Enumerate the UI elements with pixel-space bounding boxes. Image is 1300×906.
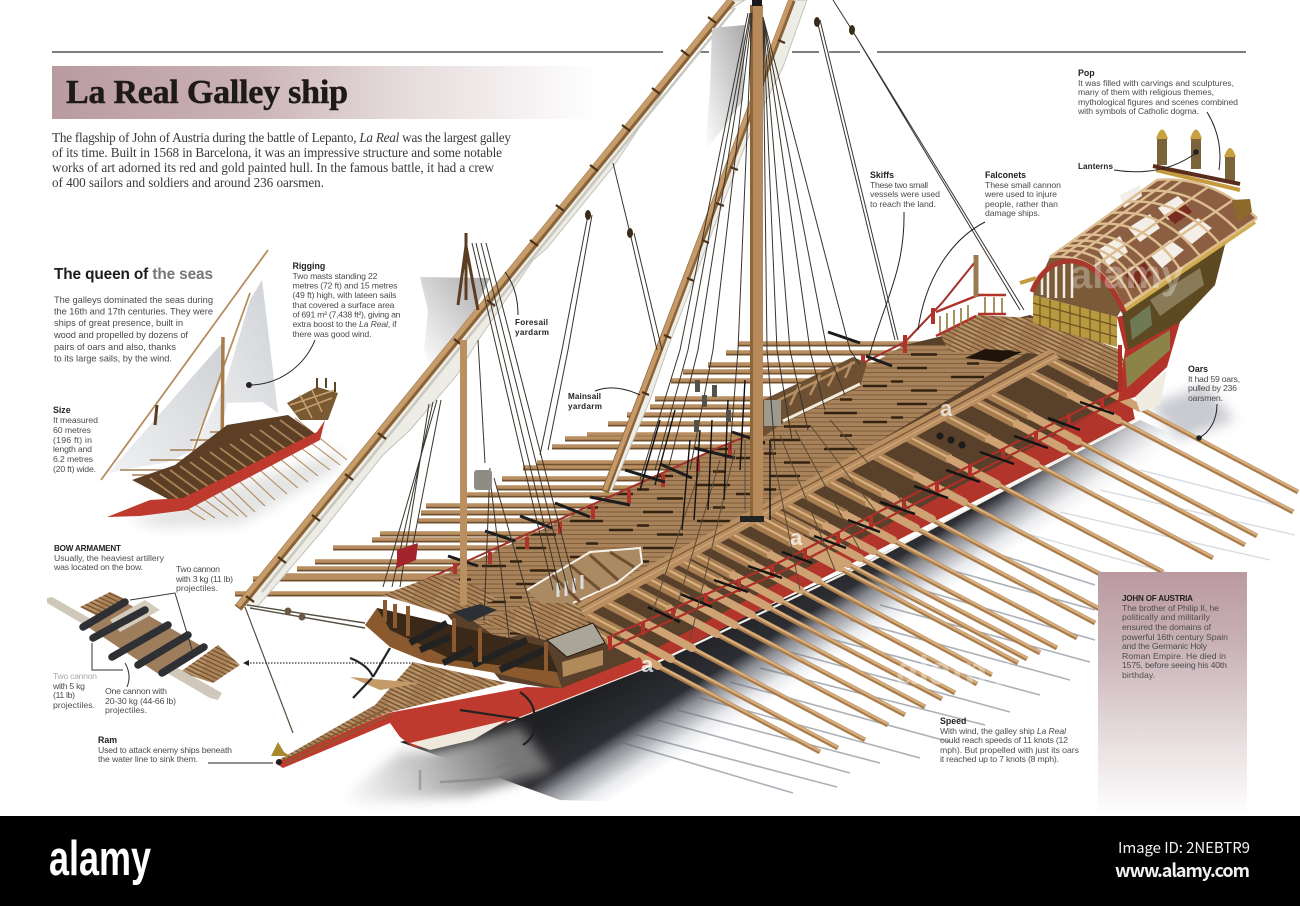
label: Size: 6.2 metres	[53, 454, 94, 464]
label: Rigging: there was good wind.	[292, 329, 372, 339]
leader: mainsail	[595, 388, 640, 395]
dotted arrow to bow	[243, 660, 413, 666]
bow red hull	[275, 657, 645, 768]
label: Falconets	[984, 170, 1061, 218]
label: Pop: with symbols of Catholic dogma.	[1077, 106, 1199, 116]
gold lattice	[1033, 295, 1117, 347]
label: Speed	[940, 716, 1080, 764]
near rail with posts and swivel guns	[607, 385, 1132, 650]
panel: John of Austria	[1098, 572, 1247, 816]
dark beam	[453, 604, 497, 622]
intro text: of 400 sailors and soldiers and around 236 oarsmen.	[52, 175, 324, 190]
label: The queen of the seas: The galleys dominated the seas during	[54, 295, 213, 305]
forward canopy two	[480, 603, 590, 640]
label: Speed: mph). But propelled with just its oars	[940, 745, 1080, 755]
footer bar	[0, 816, 1300, 906]
label: two cannon 3 kg: Two cannon	[176, 564, 220, 574]
label: Speed: With wind, the galley ship La Real	[940, 726, 1067, 736]
label: Speed: Speed	[940, 716, 966, 726]
label: Pop	[1077, 68, 1238, 116]
label: Lanterns: Lanterns	[1078, 162, 1113, 171]
small balustrade	[562, 650, 603, 677]
lower balustrade	[1125, 330, 1170, 388]
label: Size	[53, 405, 98, 474]
label: Bow armament: Usually, the heaviest artillery	[54, 553, 165, 563]
label: Oars	[1188, 364, 1240, 403]
intro text: works of art adorned its red and gold painted hull. In the famous battle, it had a crew	[52, 160, 494, 175]
alamy logo: alamy	[49, 832, 151, 886]
label: Bow armament	[53, 544, 165, 572]
label: The queen of the seas: wood and propelled by dozens of	[53, 330, 188, 340]
panel: John of Austria: ensured the domains of	[1122, 622, 1212, 632]
label: one cannon: 20-30 kg (44-66 lb)	[105, 696, 176, 706]
title band	[52, 66, 600, 119]
armament hull	[47, 597, 222, 700]
label: two cannon 3 kg	[175, 564, 233, 593]
label: Pop: mythological figures and scenes combined	[1078, 97, 1238, 107]
stern white keel	[1135, 370, 1167, 412]
stern hull	[1117, 300, 1190, 402]
label: Pop: Pop	[1078, 68, 1095, 78]
label: two cannon 5 kg	[52, 671, 97, 710]
bow white keel	[410, 720, 507, 750]
intro text: The flagship of John of Austria during the battle of Lepanto, La Real was the largest galley	[52, 130, 511, 145]
leader: foresail	[505, 272, 518, 315]
bowsprit stays	[245, 605, 365, 733]
overview far oars	[120, 432, 270, 475]
top rule	[52, 51, 1246, 53]
forward deck and bow	[271, 575, 645, 768]
label: The queen of the seas: the 16th and 17th centuries. They were	[54, 306, 213, 316]
far side oars	[235, 343, 1040, 594]
panel: John of Austria: birthday.	[1122, 670, 1155, 680]
stern deck	[940, 315, 1135, 390]
cannons	[410, 623, 545, 670]
armament leader lines	[92, 593, 193, 687]
title: La Real Galley ship	[66, 74, 348, 111]
label: Mainsail yardarm: Mainsail	[568, 392, 601, 401]
label: Foresail yardarm	[515, 318, 549, 337]
label: Falconets: damage ships.	[985, 208, 1040, 218]
label: Bow armament: was located on the bow.	[53, 562, 143, 572]
overview stern	[287, 387, 338, 420]
image id: Image ID: 2NEBTR9	[1118, 837, 1250, 858]
rigging dark lower shrouds and blocks	[397, 17, 855, 568]
stern decorated frieze	[1122, 218, 1257, 350]
panel: John of Austria: 1575, before seeing his 40th	[1122, 660, 1227, 670]
roof white windows	[1098, 185, 1212, 268]
site url: www.alamy.com	[1115, 857, 1250, 883]
label: one cannon: projectiles.	[105, 705, 147, 715]
label: Ram: the water line to sink them.	[98, 754, 198, 764]
label: Skiffs: to reach the land.	[870, 199, 936, 209]
panel: John of Austria: JOHN OF AUSTRIA	[1122, 594, 1193, 603]
leader: rigging to small ship sail	[246, 340, 315, 388]
label: Rigging: metres (72 ft) and 15 metres	[292, 280, 398, 290]
label: Falconets: were used to injure	[984, 189, 1057, 199]
label: one cannon: One cannon with	[105, 686, 167, 696]
watermarks: alamy	[896, 649, 1010, 693]
rigging	[383, 0, 1024, 645]
forward base	[365, 608, 562, 688]
ship shadow on the sea	[330, 385, 1300, 806]
near oars	[563, 357, 1298, 752]
panel: John of Austria: powerful 16th century Spain	[1122, 632, 1228, 642]
glass hatch	[547, 623, 605, 657]
label: Mainsail yardarm	[568, 392, 602, 411]
armament plank sections	[80, 592, 127, 620]
label: Skiffs: These two small	[870, 180, 928, 190]
overview deck	[132, 415, 320, 507]
label: two cannon 3 kg: projectiles.	[176, 583, 218, 593]
forward canopy one	[382, 575, 497, 615]
watermarks: a	[641, 652, 654, 677]
stern castle	[1020, 170, 1257, 412]
leader: skiffs	[868, 212, 904, 360]
overview yards and mast	[101, 250, 268, 480]
intro text: of its time. Built in 1568 in Barcelona, it was an impressive structure and some notable	[52, 145, 502, 160]
rope falls over the deck	[650, 420, 910, 640]
armament cannons	[83, 602, 204, 673]
label: Size: 60 metres	[53, 425, 92, 435]
label: Speed: it reached up to 7 knots (8 mph).	[940, 754, 1059, 764]
bow deck	[275, 662, 507, 762]
watermarks: alamy	[1070, 253, 1184, 297]
label: Foresail yardarm: Foresail	[515, 318, 548, 327]
overview oars	[155, 418, 347, 520]
label: Rigging	[292, 261, 401, 339]
leader: ram	[208, 762, 273, 764]
label: Skiffs: Skiffs	[870, 170, 894, 180]
label: Size: (196 ft) in	[53, 435, 92, 445]
label: The queen of the seas: pairs of oars and also, thanks	[54, 342, 176, 352]
lower skiff	[527, 548, 642, 603]
label: Size: (20 ft) wide.	[53, 464, 96, 474]
watermarks: a	[940, 396, 953, 421]
label: Size: length and	[53, 444, 92, 454]
central gangway	[570, 349, 1060, 619]
label: one cannon	[105, 686, 176, 715]
leader: oars	[1196, 404, 1217, 441]
anchors	[350, 648, 534, 745]
overview main sail	[193, 280, 278, 453]
overview hull	[107, 420, 325, 517]
overview fore sail	[108, 343, 222, 473]
label: Ram: Used to attack enemy ships beneath	[98, 745, 232, 755]
leader: falconets	[918, 222, 985, 330]
canopy posts	[385, 600, 546, 672]
watermarks: a	[790, 525, 803, 550]
leader: lanterns	[1114, 149, 1199, 172]
stern deck hatch and balustrade	[936, 255, 1022, 362]
barrel roof base	[1050, 179, 1257, 307]
label: Falconets: Falconets	[985, 170, 1026, 180]
panel: John of Austria: politically and militarily	[1122, 612, 1211, 622]
label: Rigging: that covered a surface area	[292, 300, 395, 310]
watermarks	[641, 253, 1184, 693]
overview shadow	[130, 450, 345, 528]
label: two cannon 5 kg: projectiles.	[53, 700, 95, 710]
far rail with swivel guns	[423, 262, 975, 581]
gun balls on deck	[936, 432, 966, 449]
upper skiff	[763, 357, 867, 437]
label: Pop: It was filled with carvings and sculptures,	[1078, 78, 1234, 88]
bow figure	[271, 742, 290, 756]
label: Oars: It had 59 oars,	[1188, 374, 1240, 384]
label: The queen of the seas: ships of great presence, built in	[54, 318, 183, 328]
mainsail yardarm with furled sail	[605, 0, 807, 492]
main mast	[740, 0, 764, 522]
label: Ram	[98, 735, 232, 764]
small ship overview	[101, 250, 347, 528]
label: Rigging: (49 ft) high, with lateen sails	[292, 290, 397, 300]
panel: John of Austria: and the Germanic Holy	[1122, 641, 1208, 651]
intro text	[52, 130, 511, 190]
bow armament diagram	[47, 592, 240, 700]
foresail yardarm with furled sail	[238, 0, 745, 608]
label: two cannon 5 kg: Two cannon	[53, 671, 97, 681]
label: The queen of the seas: The queen of the seas	[54, 266, 213, 283]
label: two cannon 5 kg: (11 lb)	[53, 690, 75, 700]
label: Rigging: of 691 m² (7,438 ft²), giving an	[292, 310, 401, 320]
label: Oars: Oars	[1188, 364, 1208, 374]
label: Ram: Ram	[98, 735, 117, 745]
label: Size: It measured	[53, 415, 98, 425]
label: Mainsail yardarm: yardarm	[568, 402, 602, 411]
label: Falconets: people, rather than	[985, 199, 1058, 209]
label: Rigging: Rigging	[292, 261, 325, 271]
interior under roof	[1033, 252, 1123, 317]
cutwater	[350, 677, 420, 690]
label: Foresail yardarm: yardarm	[515, 328, 549, 337]
label: The queen of the seas	[53, 266, 213, 364]
label: Skiffs	[870, 170, 940, 209]
label: Rigging: Two masts standing 22	[292, 271, 378, 281]
roof ribs	[1050, 179, 1257, 307]
label: Bow armament: BOW ARMAMENT	[54, 544, 121, 553]
label: Size: Size	[53, 405, 71, 415]
label: two cannon 3 kg: with 3 kg (11 lb)	[175, 574, 233, 584]
label: Oars: pulled by 236	[1188, 383, 1237, 393]
right balcony	[1232, 199, 1252, 222]
label: Speed: could reach speeds of 11 knots (12	[940, 735, 1068, 745]
label: two cannon 5 kg: with 5 kg	[52, 681, 85, 691]
stern lanterns	[1153, 130, 1240, 184]
label: The queen of the seas: to its large sails, by the wind.	[54, 354, 172, 364]
gold top beam	[1020, 170, 1240, 283]
deck base and hull strip	[423, 315, 1135, 722]
label: Falconets: These small cannon	[985, 180, 1061, 190]
label: Rigging: extra boost to the La Real, if	[292, 319, 397, 329]
fore mast	[458, 233, 478, 605]
label: Skiffs: vessels were used	[870, 189, 940, 199]
leader: pop	[1207, 112, 1220, 170]
label: Pop: many of them with religious themes,	[1078, 87, 1214, 97]
panel: John of Austria: Roman Empire. He died in	[1122, 651, 1226, 661]
label: Oars: oarsmen.	[1188, 393, 1223, 403]
panel: John of Austria: The brother of Philip II, he	[1122, 603, 1219, 613]
red front arch	[1032, 261, 1124, 312]
